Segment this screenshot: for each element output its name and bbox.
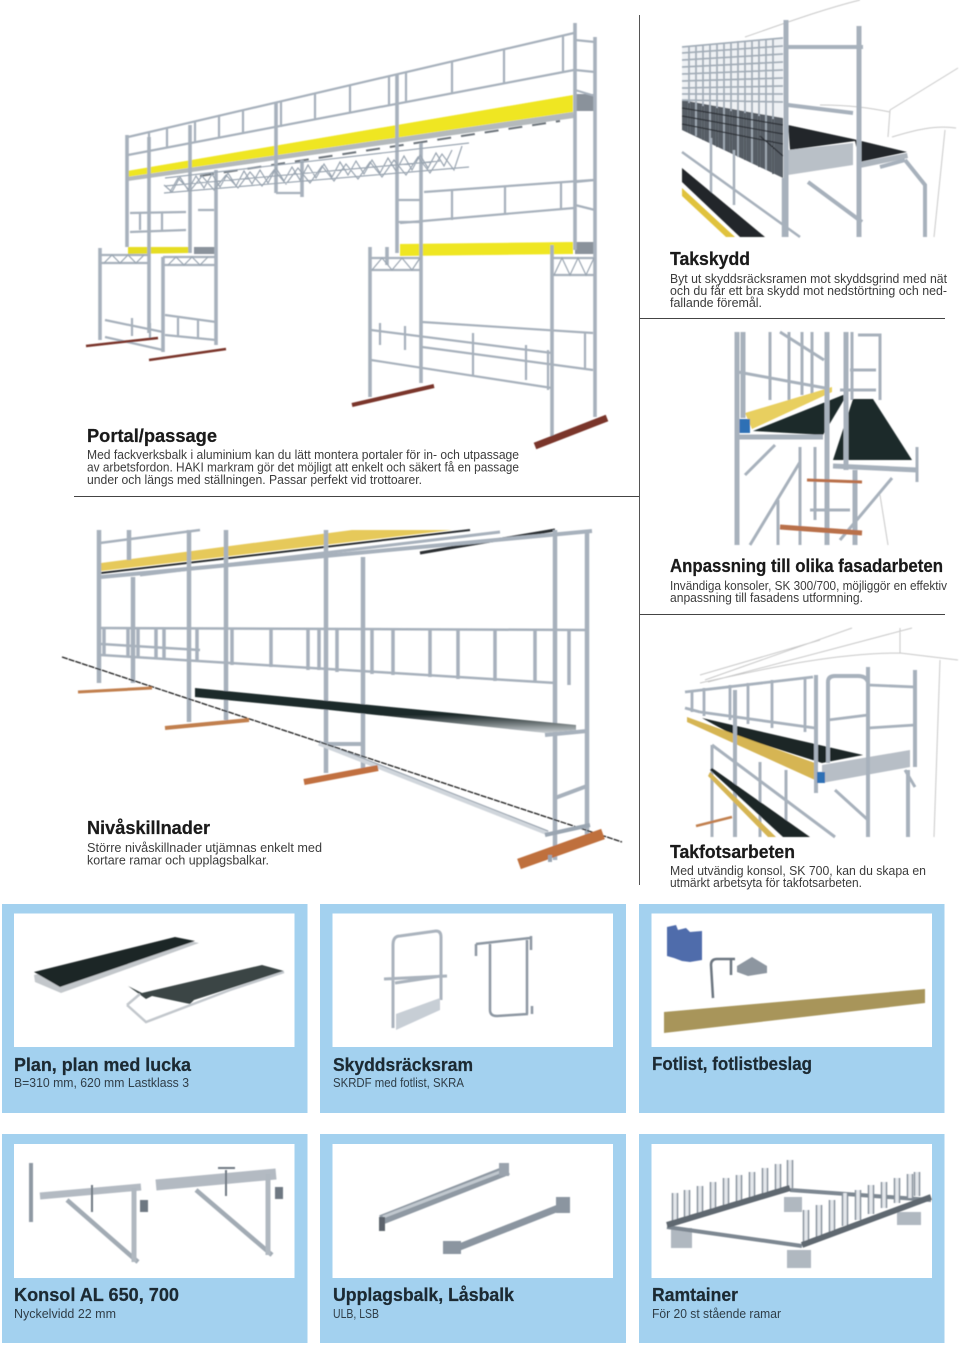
body text: anpassning description	[670, 579, 948, 605]
illustration: portal scaffold	[86, 23, 607, 446]
body text: portal description	[87, 448, 519, 487]
horizontal rule: takskydd section	[640, 318, 945, 320]
panel: Ramtainer	[639, 1134, 944, 1343]
body text: nivåskillnader description: Större nivåskillnader utjämnas enkelt med	[87, 841, 322, 855]
body text: anpassning description: Invändiga konsoler, SK 300/700, möjliggör en effektiv	[670, 579, 948, 593]
body text: takskydd description	[670, 272, 948, 310]
subtitle: ULB, LSB	[333, 1307, 379, 1321]
icon: scaffold planks	[34, 937, 284, 1022]
panel: Konsol AL 650, 700	[2, 1134, 308, 1343]
body text: takfotsarbeten description: Med utvändig konsol, SK 700, kan du skapa en	[670, 864, 926, 878]
subtitle: Nyckelvidd 22 mm	[14, 1307, 116, 1321]
icon: guardrail frames	[384, 931, 532, 1030]
illustration: takfotsarbeten eaves scaffold	[685, 628, 958, 837]
title: Upplagsbalk, Låsbalk	[333, 1284, 515, 1305]
body text: portal description: under och längs med ställningen. Passar perfekt vid trottoarer.	[87, 473, 422, 487]
illustration: nivåskillnader scaffold on slope	[62, 530, 622, 864]
panel: Fotlist, fotlistbeslag	[639, 904, 944, 1113]
heading: Takskydd: Takskydd	[670, 248, 750, 269]
title: Fotlist, fotlistbeslag	[652, 1053, 812, 1074]
subtitle: B=310 mm, 620 mm Lastklass 3	[14, 1076, 189, 1090]
horizontal rule: anpassning section	[640, 614, 945, 616]
icon: toe board and fittings	[664, 925, 925, 1033]
title: Skyddsräcksram	[333, 1054, 473, 1075]
body text: takskydd description: fallande föremål.	[670, 296, 762, 310]
body text: takskydd description: Byt ut skyddsräcksramen mot skyddsgrind med nät	[670, 272, 948, 286]
body text: anpassning description: anpassning till fasadens utformning.	[670, 591, 863, 605]
section text: Anpassning	[670, 555, 948, 605]
subtitle: För 20 st stående ramar	[652, 1307, 781, 1321]
heading: Takfotsarbeten: Takfotsarbeten	[670, 841, 795, 862]
title: Ramtainer	[652, 1284, 738, 1305]
illustration: takskydd roof guard	[682, 0, 958, 237]
body text: nivåskillnader description	[87, 841, 322, 868]
panel: Plan, plan med lucka	[2, 904, 308, 1113]
body text: portal description: Med fackverksbalk i aluminium kan du lätt montera portaler för in- och utpassage	[87, 448, 519, 462]
title: Konsol AL 650, 700	[14, 1284, 179, 1305]
icon: support beams	[379, 1163, 570, 1254]
panel: Skyddsräcksram	[320, 904, 626, 1113]
section text: Portal/passage	[87, 425, 519, 487]
heading: Nivåskillnader: Nivåskillnader	[87, 817, 210, 838]
body text: nivåskillnader description: kortare ramar och upplagsbalkar.	[87, 854, 269, 868]
section text: Takfotsarbeten	[670, 841, 926, 890]
section text: Takskydd	[670, 248, 948, 310]
illustration: anpassning consoles	[737, 332, 917, 545]
body text: takfotsarbeten description	[670, 864, 926, 890]
icon: console brackets	[31, 1163, 283, 1262]
section text: Nivåskillnader	[87, 817, 322, 868]
horizontal rule: portal section	[74, 496, 639, 498]
body text: takfotsarbeten description: utmärkt arbetsyta för takfotsarbeten.	[670, 876, 862, 890]
body text: portal description: av arbetsfordon. HAKI markram gör det möjligt att enkelt och säkert få en passage	[87, 460, 519, 474]
subtitle: SKRDF med fotlist, SKRA	[333, 1076, 465, 1090]
panel: Upplagsbalk, Låsbalk	[320, 1134, 626, 1343]
body text: takskydd description: och du får ett bra skydd mot nedstörtning och ned-	[670, 284, 947, 298]
icon: frame container rack	[667, 1160, 931, 1268]
vertical divider	[638, 15, 640, 885]
heading: Portal/passage: Portal/passage	[87, 425, 217, 446]
title: Plan, plan med lucka	[14, 1054, 192, 1075]
